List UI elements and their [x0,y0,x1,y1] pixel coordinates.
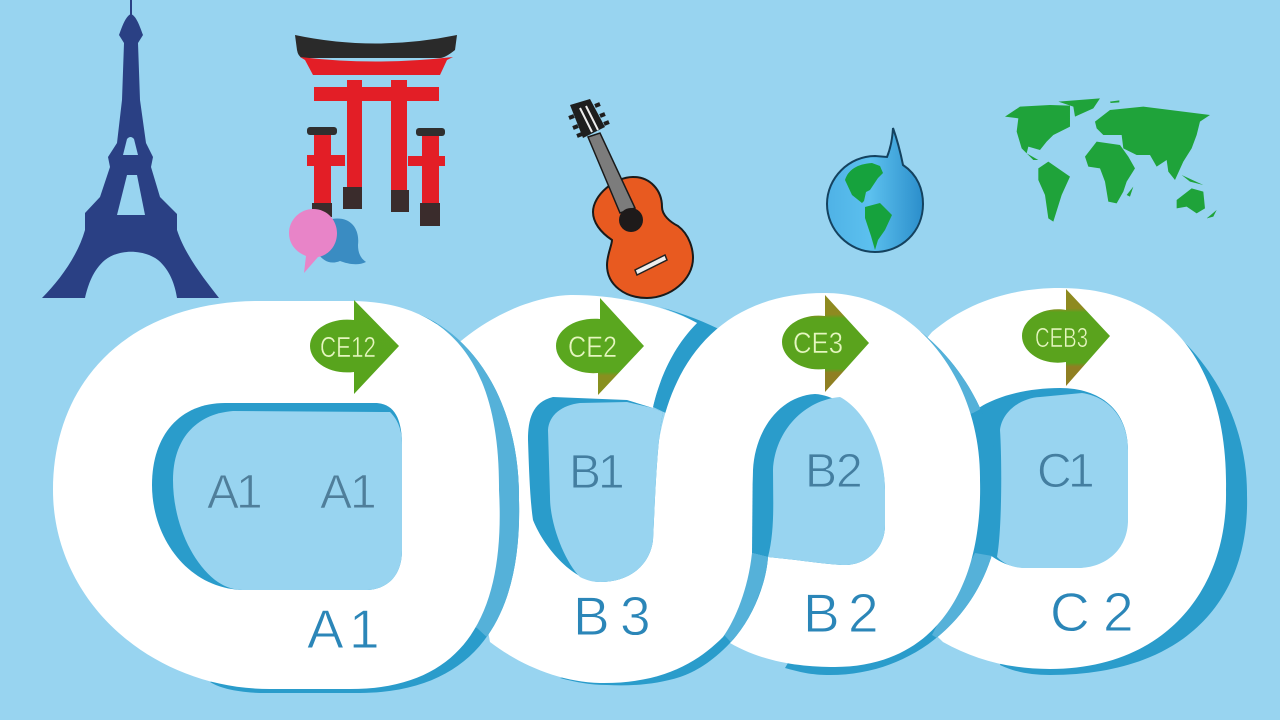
ring: C [900,288,1247,675]
chain of rings [53,288,1247,693]
label: B1 inner: B1 [569,446,625,499]
label: C1 inner: C1 [1037,445,1095,498]
label: B2 inner: B2 [805,445,863,498]
label: B 3: B 3 [573,585,651,647]
icon: eiffel tower [42,0,219,298]
ring: B back [440,295,725,642]
icon: speech bubbles [289,209,366,273]
icon: guitar [569,99,693,298]
label: A 1: A 1 [307,598,380,660]
icon: torii gate [295,35,457,226]
arrow badge: CE12: CE12 [320,332,376,364]
arrow badge: CEB3: CEB3 [1035,322,1088,353]
label: C 2: C 2 [1050,581,1134,643]
arrow badge: CEB3 [1022,289,1110,386]
label: B 2: B 2 [803,582,879,644]
arrow badge: CE12 [310,300,399,394]
ring: B front arm [480,397,768,685]
guitar sound hole [619,208,643,232]
guitar bridge [635,255,667,275]
guitar neck [588,133,635,213]
arrow badge: CE3 [782,295,869,392]
arrow badge: CE2: CE2 [568,331,617,364]
arrow badge: CE3: CE3 [793,327,843,360]
arrow badge: CE2 [556,298,644,395]
guitar body [593,177,693,298]
icon: world map [1005,98,1217,222]
icon: globe with speech tail [827,128,923,252]
guitar strings [580,106,598,132]
guitar tuning pegs [569,104,609,136]
label: A1 inner right: A1 [320,466,377,519]
ring: A [53,301,519,693]
ring: B2 [655,293,1000,675]
guitar head [570,99,605,138]
label: A1 inner left: A1 [207,466,263,519]
